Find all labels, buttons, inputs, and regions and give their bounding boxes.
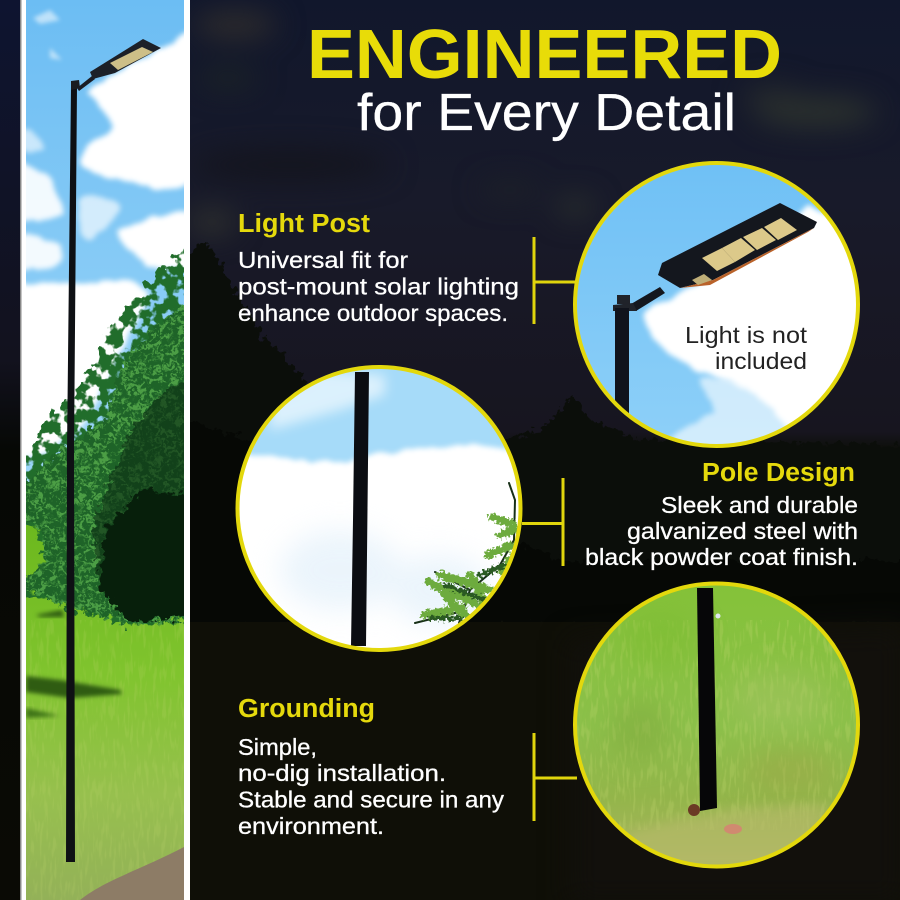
clouds bbox=[240, 440, 518, 648]
grass bbox=[26, 525, 184, 900]
panel: full pole photo bbox=[15, 0, 195, 900]
stone bbox=[724, 824, 742, 834]
connector: pole design bbox=[522, 478, 563, 566]
panel: grounding text bbox=[238, 695, 504, 839]
panel: pole design text bbox=[585, 459, 858, 570]
note: light not included: included bbox=[715, 348, 807, 374]
circle: grounding close-up bbox=[570, 580, 870, 870]
panel: light post text: Light Post bbox=[238, 210, 371, 238]
dark path foreground bbox=[185, 622, 900, 900]
icon: lamp head bbox=[658, 203, 817, 288]
panel: grounding text: environment. bbox=[238, 813, 384, 839]
panel: light post text: Universal fit for bbox=[238, 247, 408, 273]
panel: grounding text: Stable and secure in any bbox=[238, 786, 504, 812]
distant tree line bbox=[182, 240, 900, 625]
pole base bbox=[697, 588, 717, 811]
pole bbox=[351, 372, 369, 646]
panel: light post text bbox=[238, 210, 519, 326]
title: ENGINEERED bbox=[307, 15, 782, 93]
cloud behind lamp bbox=[640, 202, 856, 426]
panel: pole design text: Pole Design bbox=[702, 459, 855, 487]
panel: light post text: enhance outdoor spaces. bbox=[238, 300, 508, 326]
clouds bbox=[26, 28, 184, 458]
panel: pole design text: Sleek and durable bbox=[661, 492, 858, 518]
tree branch bbox=[415, 483, 515, 625]
panel: grounding text: Simple, bbox=[238, 734, 317, 760]
panel: grounding text: no-dig installation. bbox=[238, 760, 446, 786]
connector: grounding bbox=[534, 733, 577, 821]
connector: light post bbox=[534, 237, 576, 324]
panel: light post text: post-mount solar lighting bbox=[238, 274, 519, 300]
tree bbox=[26, 248, 184, 631]
panel: pole design text: galvanized steel with bbox=[627, 518, 858, 544]
note: light not included bbox=[685, 322, 808, 374]
circle: lamp close-up bbox=[570, 160, 875, 460]
title: for Every Detail bbox=[357, 84, 736, 142]
panel: pole design text: black powder coat finish. bbox=[585, 544, 858, 570]
title bbox=[307, 15, 782, 142]
panel: grounding text: Grounding bbox=[238, 695, 375, 723]
circle: pole close-up bbox=[236, 365, 522, 652]
note: light not included: Light is not bbox=[685, 322, 808, 348]
tall pole and lamp bbox=[66, 39, 161, 862]
